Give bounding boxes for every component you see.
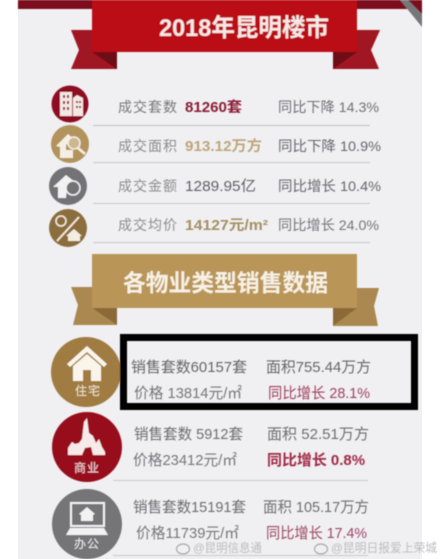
row: average price (49, 209, 379, 247)
commercial figures: 同比增长 0.8% (267, 451, 365, 469)
row: units sold: 成交套数 (118, 99, 177, 115)
office figures: 价格11739元/㎡ (136, 525, 239, 542)
icon: residential: 住宅 (75, 383, 100, 398)
icon: residential (51, 337, 121, 407)
commercial figures: 销售套数 5912套 (134, 426, 243, 443)
gold section ribbon (71, 254, 379, 326)
panel: commercial (52, 412, 369, 482)
row: units sold: 同比下降 14.3% (278, 99, 379, 115)
panel: overall stats (49, 86, 381, 247)
office figures (133, 499, 369, 542)
office figures: 销售套数15191套 (133, 499, 246, 516)
watermark: @昆明日报爱上荣城 (331, 540, 437, 555)
icon: commercial (52, 412, 122, 482)
icon: office: 办公 (74, 536, 99, 551)
office figures: 面积 105.17万方 (263, 499, 369, 516)
residential figures: 销售套数60157套 (131, 359, 247, 376)
icon: weibo logo right (314, 544, 328, 554)
commercial figures (133, 426, 369, 469)
row: floor area: 同比下降 10.9% (278, 138, 381, 154)
top band (18, 0, 422, 27)
section heading: 各物业类型销售数据 (123, 270, 328, 296)
office figures: 同比增长 17.4% (266, 525, 367, 542)
commercial figures: 价格23412元/㎡ (133, 452, 237, 469)
panel: residential (51, 337, 414, 407)
row: floor area (51, 125, 381, 163)
row: transaction value: 成交金额 (118, 178, 177, 194)
row: transaction value: 同比增长 10.4% (278, 178, 381, 194)
icon: weibo logo left (176, 544, 190, 554)
residential figures: 同比增长 28.1% (268, 385, 370, 402)
watermark (176, 540, 437, 555)
row: units sold (52, 86, 379, 122)
red title ribbon (71, 0, 380, 69)
panel: office (52, 489, 369, 559)
residential figures: 面积755.44万方 (266, 359, 371, 376)
row: average price: 14127元/m² (185, 218, 268, 234)
row: average price: 成交均价 (118, 217, 177, 233)
commercial figures: 面积 52.51万方 (267, 426, 369, 443)
row: average price: 同比增长 24.0% (278, 217, 379, 233)
icon: commercial: 商业 (74, 460, 99, 475)
residential figures: 价格 13814元/㎡ (134, 385, 242, 402)
highlight box (124, 338, 414, 406)
icon: office (52, 489, 122, 559)
row: transaction value (49, 167, 381, 205)
title: 2018年昆明楼市 (159, 14, 329, 42)
row: units sold: 81260套 (185, 99, 243, 116)
residential figures (131, 359, 371, 402)
row: floor area: 成交面积 (118, 138, 177, 154)
row: transaction value: 1289.95亿 (185, 178, 256, 195)
watermark: @昆明信息通 (193, 540, 262, 555)
row: floor area: 913.12万方 (185, 137, 262, 155)
